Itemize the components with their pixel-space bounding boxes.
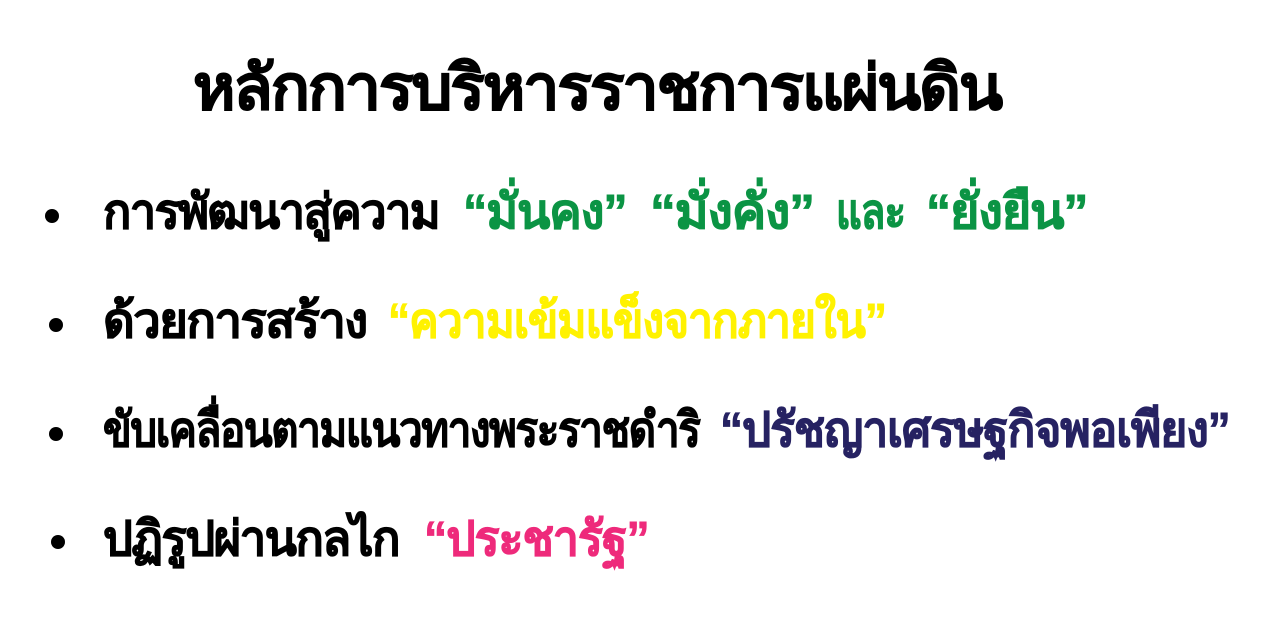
line 3 text: ขับเคลื่อนตามแนวทางพระราชดำริ bbox=[103, 404, 700, 457]
title: หลักการบริหารราชการแผ่นดิน bbox=[193, 54, 1001, 123]
line 1 highlight: “มั่นคง” bbox=[463, 186, 627, 239]
line 1 highlight: “ยั่งยืน” bbox=[926, 186, 1087, 239]
line 1 highlight: “มั่งคั่ง” bbox=[650, 186, 814, 239]
line 2 text: ด้วยการสร้าง bbox=[103, 295, 367, 348]
line 3 highlight: “ปรัชญาเศรษฐกิจพอเพียง” bbox=[720, 404, 1230, 457]
bullet 2 bbox=[49, 318, 63, 332]
bullet 1 bbox=[45, 209, 59, 223]
line 4 highlight: “ประชารัฐ” bbox=[424, 513, 649, 566]
line 4 text: ปฏิรูปผ่านกลไก bbox=[103, 513, 399, 566]
bullet 4 bbox=[51, 535, 65, 549]
bullet 3 bbox=[49, 427, 63, 441]
line 1 highlight: และ bbox=[836, 186, 905, 239]
line 2 highlight: “ความเข้มแข็งจากภายใน” bbox=[388, 295, 886, 348]
line 1 text: การพัฒนาสู่ความ bbox=[103, 186, 439, 239]
